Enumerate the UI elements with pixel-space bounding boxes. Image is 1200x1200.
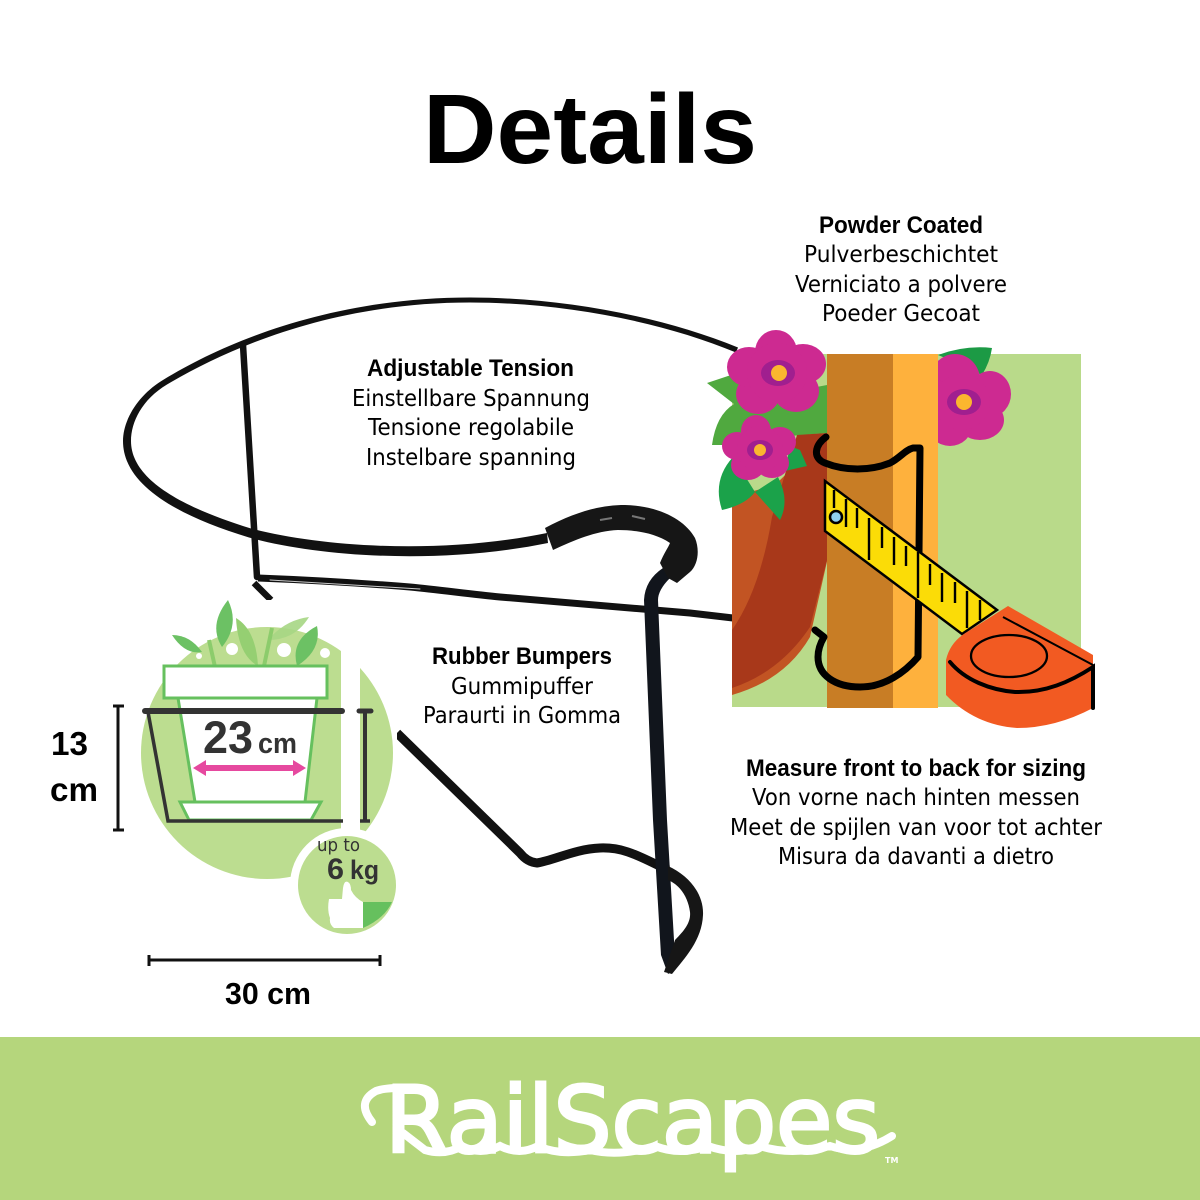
tape case — [946, 606, 1093, 728]
footer band — [0, 1037, 1200, 1200]
logo: TM — [885, 1156, 898, 1165]
leaves — [707, 347, 992, 445]
plant leaves — [172, 600, 330, 667]
rack foot — [664, 866, 703, 974]
measuring illustration — [707, 330, 1093, 728]
pot diameter — [203, 712, 297, 763]
double arrow — [193, 760, 306, 776]
label: adjustable tension: Einstellbare Spannung — [352, 386, 590, 412]
pot diameter: 23 — [203, 712, 253, 763]
green circle — [141, 627, 393, 879]
label: rubber bumpers: Gummipuffer — [451, 674, 594, 700]
width dimension — [149, 955, 380, 1011]
lower leaves — [719, 446, 807, 520]
label: adjustable tension: Tensione regolabile — [367, 415, 574, 441]
height dimension: cm — [50, 771, 98, 808]
mask behind inset — [120, 600, 397, 840]
green background — [732, 354, 1081, 707]
rubber bumper — [545, 505, 698, 583]
label: powder coated: Verniciato a polvere — [795, 272, 1007, 298]
top ring — [123, 298, 738, 556]
pot outline — [164, 666, 327, 820]
title: Details — [423, 74, 757, 184]
tape blade — [825, 481, 997, 634]
sizing inset — [141, 600, 404, 942]
pot diameter: cm — [258, 728, 297, 760]
label: powder coated: Pulverbeschichtet — [804, 242, 998, 268]
post — [827, 354, 938, 708]
label: measure front to back: Meet de spijlen van voor tot achter — [730, 815, 1102, 841]
flower 3 — [722, 415, 796, 480]
bracket — [815, 437, 920, 687]
logo: RailScapes — [385, 1067, 880, 1174]
white band — [341, 640, 360, 840]
height dimension: 13 — [51, 725, 88, 762]
rod — [644, 568, 674, 974]
flower 1 — [727, 330, 826, 414]
label: powder coated: Powder Coated — [819, 212, 983, 239]
label: measure front to back: Misura da davanti a dietro — [778, 844, 1054, 870]
weight badge: up to — [317, 835, 360, 856]
wire plant holder rack — [243, 345, 733, 870]
label: adjustable tension — [352, 355, 590, 471]
label: measure front to back: Measure front to back for sizing — [746, 755, 1086, 782]
label: rubber bumpers: Rubber Bumpers — [432, 643, 612, 670]
label: adjustable tension: Instelbare spanning — [366, 445, 576, 471]
label: measure front to back — [730, 755, 1102, 870]
icon: thumbs up — [328, 882, 363, 928]
label: powder coated — [795, 212, 1007, 327]
label: rubber bumpers — [423, 643, 621, 729]
label: adjustable tension: Adjustable Tension — [367, 355, 574, 382]
weight badge: kg — [350, 855, 379, 885]
holder frame — [145, 711, 371, 821]
weight badge — [290, 828, 404, 942]
flower pot — [732, 433, 828, 695]
label: powder coated: Poeder Gecoat — [822, 301, 980, 327]
label: rubber bumpers: Paraurti in Gomma — [423, 703, 621, 729]
width dimension: 30 cm — [225, 976, 311, 1011]
height dimension — [50, 706, 124, 830]
flower 2 — [938, 354, 1011, 446]
weight badge: 6 — [327, 853, 344, 886]
label: measure front to back: Von vorne nach hinten messen — [752, 785, 1080, 811]
